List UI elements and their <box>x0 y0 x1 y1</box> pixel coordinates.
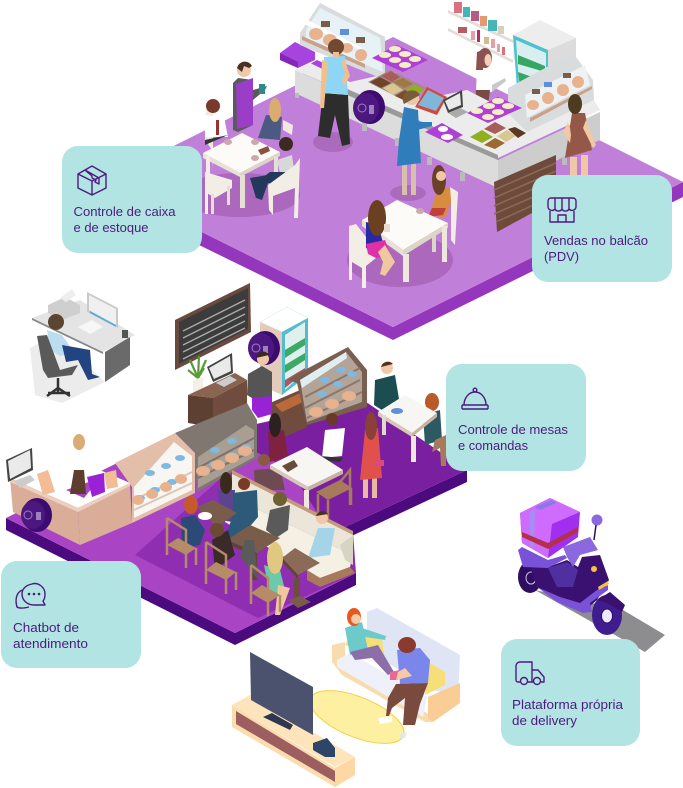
woman in blue dress <box>390 90 432 201</box>
television <box>250 652 313 735</box>
woman at right of counter <box>563 94 596 177</box>
food tray: right <box>467 97 522 123</box>
top restaurant scene <box>101 2 683 340</box>
cashier desk <box>188 373 247 427</box>
card: controle de caixa: Controle de caixa <box>74 204 176 219</box>
lower restaurant scene <box>6 283 467 645</box>
left table group <box>203 62 300 218</box>
display case left <box>115 433 195 523</box>
man and woman at right table <box>374 362 446 466</box>
card: delivery <box>501 639 640 746</box>
booth tables <box>181 496 320 615</box>
road shadow <box>535 590 665 652</box>
main serving counter <box>295 63 600 188</box>
cashier man <box>247 352 272 398</box>
fridge <box>513 20 576 88</box>
card: controle de mesas: e comandas <box>458 438 528 453</box>
card: vendas no balcão: Vendas no balcão <box>544 233 648 248</box>
top floor platform <box>101 37 683 340</box>
booth seating <box>225 470 355 587</box>
lower floor front area <box>6 422 356 645</box>
booth customers <box>218 472 335 558</box>
card: controle de mesas <box>446 364 586 471</box>
rear wheel <box>518 561 542 593</box>
desk worker illustration <box>30 289 135 403</box>
drinks fridge <box>260 307 308 395</box>
icon: box <box>78 166 106 195</box>
food pans <box>368 70 427 100</box>
plant <box>188 356 206 396</box>
brown counter with register <box>252 387 307 443</box>
shadow left table <box>180 173 300 217</box>
sofa <box>332 608 460 722</box>
man on sofa <box>378 637 430 738</box>
living room with TV and sofa <box>232 608 460 787</box>
card: delivery: Plataforma própria <box>512 697 624 712</box>
card: vendas no balcão <box>532 175 672 282</box>
food pans: right <box>470 122 526 149</box>
icon: cloche <box>462 388 488 409</box>
woman on sofa <box>345 608 400 680</box>
game console <box>313 738 335 757</box>
rug <box>303 680 411 754</box>
customers at center table <box>254 413 345 520</box>
round brand sign <box>248 331 280 365</box>
TV console <box>232 695 355 787</box>
display case centre <box>175 403 257 492</box>
chalkboard <box>175 283 251 370</box>
wood panel <box>494 155 556 232</box>
card: vendas no balcão: (PDV) <box>544 249 579 264</box>
purple boxes <box>280 42 332 80</box>
card: delivery: de delivery <box>512 713 578 728</box>
shadow right table <box>347 233 453 287</box>
back counter woman <box>475 48 506 106</box>
round brand sign <box>353 90 385 124</box>
reception counter <box>6 434 132 545</box>
icon: delivery truck <box>516 662 544 684</box>
woman in red dress <box>360 412 384 498</box>
lower floor rear area <box>185 400 467 540</box>
display case right <box>288 347 367 425</box>
food tray: front <box>425 123 463 143</box>
man in blue shirt <box>313 39 353 152</box>
icon: chat bubbles <box>16 584 45 608</box>
left display case <box>300 3 385 80</box>
monitor on desk <box>207 353 237 387</box>
cash monitor <box>443 90 468 118</box>
wooden chairs <box>167 518 280 616</box>
scooter body <box>518 537 609 613</box>
card: controle de caixa: e de estoque <box>74 220 148 235</box>
card: controle de caixa <box>62 146 202 253</box>
card: chatbot <box>1 561 141 668</box>
food tray: upper <box>372 45 428 72</box>
water glasses and red tray <box>415 87 447 115</box>
front wheel <box>592 592 625 635</box>
card: chatbot: Chatbot de <box>13 620 79 635</box>
icon: store <box>548 198 576 222</box>
scooter delivery illustration <box>518 498 665 652</box>
wall shelves with products <box>448 2 513 63</box>
card: controle de mesas: Controle de mesas <box>458 422 568 437</box>
mirror <box>592 514 602 540</box>
card: chatbot: atendimento <box>13 636 88 651</box>
right table group <box>349 165 458 288</box>
right display case <box>508 53 594 132</box>
chair at center table <box>316 470 352 522</box>
delivery box <box>520 498 580 558</box>
